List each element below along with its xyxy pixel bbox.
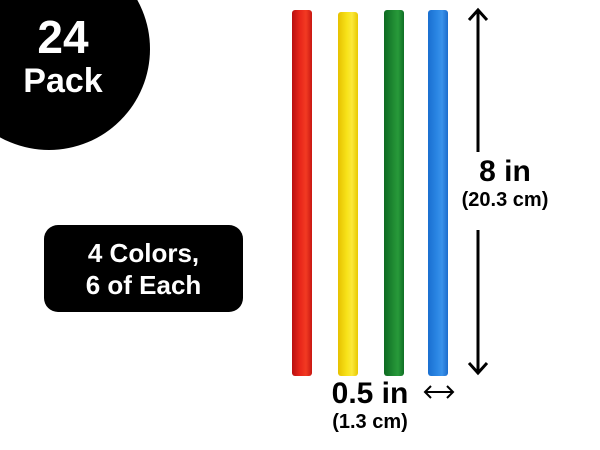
rod: green: [384, 10, 404, 376]
arrow: vertical length indicator: [468, 8, 488, 376]
text: 0.5 in (1.3 cm): [332, 377, 408, 433]
label: 4 Colors, 6 of Each: 4 Colors,: [88, 238, 199, 268]
text: 0.5 in (1.3 cm): 0.5 in: [332, 377, 408, 410]
badge text: Pack: [23, 62, 103, 100]
badge: 24 Pack circle: [0, 0, 150, 150]
badge text: 24: [37, 11, 89, 63]
label: 4 Colors, 6 of Each: 6 of Each: [86, 270, 201, 300]
rod: blue: [428, 10, 448, 376]
rod: red: [292, 10, 312, 376]
text: 8 in (20.3 cm): [462, 155, 548, 211]
rod: yellow: [338, 12, 358, 376]
arrow: width indicator: [424, 385, 454, 399]
badge text: [23, 11, 103, 100]
text: 0.5 in (1.3 cm): (1.3 cm): [332, 411, 408, 433]
text: 8 in (20.3 cm): (20.3 cm): [462, 189, 548, 211]
text: 8 in (20.3 cm): 8 in: [479, 155, 531, 188]
label: 4 Colors, 6 of Each: [44, 225, 243, 312]
